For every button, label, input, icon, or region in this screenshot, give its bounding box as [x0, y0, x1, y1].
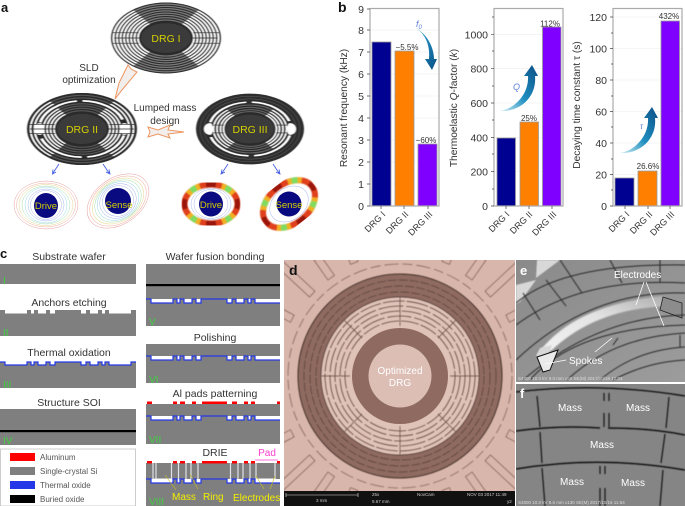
label: Q: Q: [513, 82, 520, 92]
annotation: electrodes: [614, 270, 664, 326]
curved arrow: Q: [500, 65, 538, 111]
tick labels: 1000: [465, 29, 488, 41]
x labels: [607, 209, 676, 238]
tick labels: 6: [358, 69, 364, 81]
value labels: 112%: [540, 20, 560, 28]
mass labels: [558, 403, 650, 489]
tick labels: 60: [595, 106, 607, 118]
x labels: DRG II: [628, 209, 654, 236]
central light disc: [368, 344, 432, 408]
mode shape: DRG II sense: [77, 163, 159, 239]
SEM caption: S4800 10.0 kV 9.0 mm x50 SE(M) 2017/10/16 12:03: [518, 376, 623, 381]
label: SLD optimization: SLD: [79, 63, 99, 74]
annotation: spokes: Spokes: [569, 356, 602, 367]
tick labels: 40: [595, 138, 607, 150]
step III: thermal oxidation: [0, 347, 136, 391]
label f: f: [520, 386, 525, 401]
tick labels: [465, 29, 488, 213]
label: optimized DRG: DRG: [389, 378, 411, 389]
panel a: DRG I resonator: [111, 3, 221, 73]
scale bar strip: NovCam: [417, 492, 435, 497]
curved arrow: f0: [400, 23, 437, 70]
tick labels: 9: [358, 4, 364, 16]
tick labels: 5: [358, 91, 364, 103]
tick labels: 0: [482, 201, 488, 213]
scale bar strip: [284, 491, 515, 506]
tick labels: [589, 12, 607, 213]
tick labels: 1: [358, 179, 364, 191]
scale bar strip: 3 mm: [316, 498, 328, 503]
corner spoke highlights: [516, 260, 560, 362]
arrow: SLD optimization: [115, 65, 137, 99]
tick labels: 400: [470, 132, 488, 144]
label: Drive: Drive: [200, 200, 222, 211]
panel a label: a: [1, 0, 9, 15]
tick labels: 120: [589, 12, 607, 24]
tick labels: 3: [358, 135, 364, 147]
x labels: DRG III: [648, 209, 676, 238]
tick labels: 80: [595, 75, 607, 87]
arrows: to mode shapes: [52, 164, 280, 174]
step V: wafer fusion bonding: V: [149, 317, 156, 328]
label: DRG II: DRG II: [66, 124, 98, 136]
value labels: −5.5%: [396, 43, 418, 52]
label: Drive: Drive: [35, 201, 57, 212]
scale bar strip: y2: [507, 499, 512, 504]
tick labels: 7: [358, 47, 364, 59]
step VI: polishing: [146, 332, 280, 386]
arrow: lumped mass design: [148, 125, 184, 138]
label e: e: [520, 263, 527, 278]
step VII: Al pads patterning: Al pads patterning: [173, 388, 257, 400]
value labels: [521, 20, 560, 123]
label: Sense: Sense: [106, 200, 132, 211]
step III: thermal oxidation: Thermal oxidation: [27, 347, 111, 359]
annotation: spokes: [545, 338, 612, 367]
panel a: DRG III resonator: [196, 94, 304, 164]
x labels: DRG II: [384, 209, 410, 236]
label: tau: τ: [640, 122, 644, 131]
step II: anchors etching: [0, 297, 136, 339]
value labels: 25%: [521, 114, 537, 123]
annotations: mass, ring, electrodes: Mass: [172, 492, 196, 503]
label: Sense: Sense: [276, 200, 302, 211]
tick labels: 8: [358, 25, 364, 37]
value labels: 432%: [659, 12, 679, 21]
panel e: SEM of electrodes and spokes: [516, 260, 685, 382]
x labels: DRG I: [607, 209, 631, 234]
annotations: mass, ring, electrodes: Ring: [203, 492, 224, 503]
value labels: 26.6%: [637, 162, 659, 171]
y axis title: Thermoelastic Q-factor (k): [449, 49, 460, 167]
legend: Thermal oxide: [40, 481, 91, 490]
label: DRG III: DRG III: [232, 124, 268, 136]
value labels: [637, 12, 679, 171]
y axis title: Resonant frequency (kHz): [339, 49, 350, 167]
label: f0: 0: [419, 25, 423, 31]
y axis title: Decaying time constant τ (s): [572, 41, 583, 169]
label d: d: [289, 262, 298, 278]
tick labels: 800: [470, 64, 488, 76]
tick labels: 2: [358, 157, 364, 169]
mass labels: Mass: [558, 403, 582, 414]
annotations: mass, ring, electrodes: [165, 474, 280, 504]
tick labels: 600: [470, 98, 488, 110]
annotations: mass, ring, electrodes: Electrodes: [233, 493, 280, 504]
legend: Buried oxide: [40, 495, 85, 504]
tick labels: 0: [601, 201, 607, 213]
annotation: pad: Pad: [258, 448, 276, 459]
label: optimization: optimization: [62, 75, 116, 86]
step I: substrate wafer: [0, 251, 136, 287]
label: optimized DRG: Optimized: [377, 366, 423, 377]
step V: wafer fusion bonding: [146, 251, 280, 328]
legend: [0, 449, 136, 506]
label: optimized DRG: [377, 366, 423, 389]
central dark disc: [352, 328, 448, 424]
step I: substrate wafer: Substrate wafer: [32, 251, 106, 263]
x labels: DRG II: [508, 209, 534, 236]
tick labels: [358, 4, 364, 213]
scale bar strip: NOV 03 2017 11:49: [467, 492, 507, 497]
scale bar strip: 25x: [372, 492, 380, 497]
electrodes around the device: [269, 248, 531, 504]
step VII: Al pads patterning: VII: [149, 435, 161, 446]
SEM caption: S4800 10.0 kV 8.6 mm x130 SE(M) 2017/10/16 11:54: [518, 500, 625, 505]
x labels: DRG I: [363, 209, 387, 234]
legend: Aluminum: [40, 453, 76, 462]
step IV: structure SOI: IV: [3, 436, 13, 447]
step VII: Al pads patterning: [146, 388, 280, 446]
step II: anchors etching: Anchors etching: [31, 297, 107, 309]
x labels: DRG I: [487, 209, 511, 234]
step VI: polishing: VI: [149, 375, 158, 386]
panel c label: c: [0, 246, 7, 261]
mode shape: DRG III drive: [184, 184, 238, 224]
step VIII: DRIE: [146, 447, 280, 506]
trench lines: [516, 388, 685, 506]
step III: thermal oxidation: III: [3, 380, 11, 391]
label: f0: f: [416, 19, 419, 29]
tick labels: 200: [470, 166, 488, 178]
x labels: DRG III: [406, 209, 434, 238]
panel a: DRG II resonator: [27, 93, 137, 165]
inner ring structure: [321, 297, 479, 455]
step IV: structure SOI: Structure SOI: [37, 397, 101, 409]
label: design: design: [150, 116, 180, 127]
bright electrode band: [537, 296, 680, 355]
mass labels: Mass: [590, 440, 614, 451]
step II: anchors etching: II: [3, 328, 9, 339]
x labels: [487, 209, 558, 238]
chart: resonant frequency: [339, 4, 439, 238]
label: Lumped mass: Lumped mass: [134, 103, 196, 114]
mass labels: Mass: [626, 403, 650, 414]
step VI: polishing: Polishing: [194, 332, 236, 344]
mode shape: DRG III sense: [254, 170, 324, 238]
mass labels: Mass: [560, 477, 584, 488]
scale bar strip: 9.67 mm: [372, 499, 390, 504]
panel d: optimized DRG micrograph: [284, 260, 515, 506]
annotation: electrodes: Electrodes: [614, 270, 661, 281]
step IV: structure SOI: [0, 397, 136, 447]
step I: substrate wafer: I: [3, 276, 6, 287]
chart: thermoelastic Q-factor: [449, 8, 563, 238]
label: DRG I: DRG I: [151, 33, 181, 45]
mass labels: Mass: [621, 478, 645, 489]
tick labels: 20: [595, 170, 607, 182]
x labels: DRG III: [530, 209, 558, 238]
dark outer mass ring: [298, 274, 502, 478]
tick labels: 100: [589, 44, 607, 56]
legend: Single-crystal Si: [40, 467, 98, 476]
curved arrow: tau: [620, 107, 658, 153]
step VIII: DRIE: DRIE: [202, 447, 228, 459]
chart: decaying time constant: [572, 8, 682, 238]
panel f: SEM of lumped masses: [516, 384, 685, 506]
etched trench lines: [516, 260, 685, 380]
mode shape: DRG II drive: [14, 181, 78, 229]
bright spoke triangle: [537, 350, 558, 372]
value labels: [396, 43, 436, 145]
x labels: [363, 209, 434, 238]
tick labels: 0: [358, 201, 364, 213]
value labels: −60%: [416, 136, 436, 145]
step V: wafer fusion bonding: Wafer fusion bonding: [166, 251, 265, 263]
tick labels: 4: [358, 113, 364, 125]
